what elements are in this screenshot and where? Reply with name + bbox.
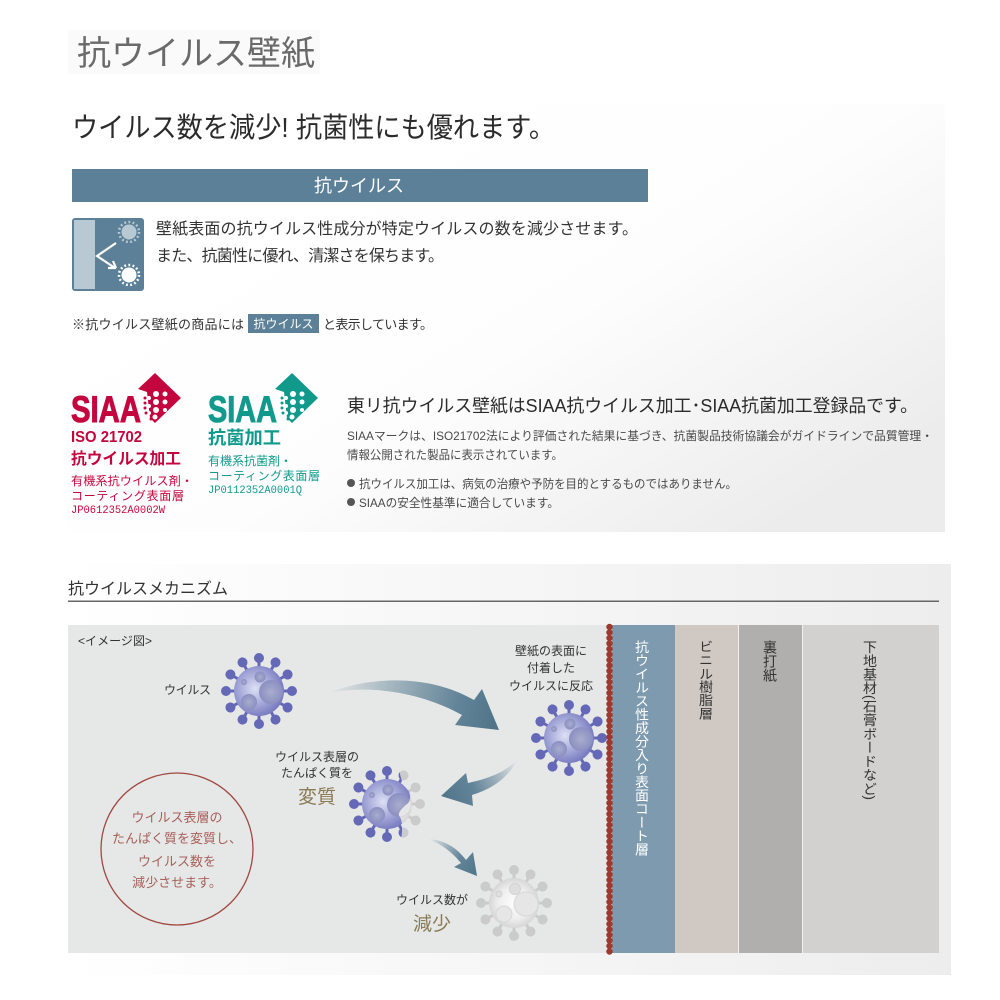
SIAA description xyxy=(347,428,933,462)
denature label: 変質 xyxy=(298,786,336,808)
callout circle: たんぱく質を変質し、 xyxy=(112,831,242,846)
logo: SIAA antibacterial: 抗菌加工 xyxy=(208,428,281,448)
denature label xyxy=(275,750,359,808)
logo: SIAA anti-virus xyxy=(71,373,193,517)
description text xyxy=(156,220,638,265)
panel: mechanism xyxy=(68,564,951,975)
note with tag: 抗ウイルス xyxy=(253,317,314,331)
layer: vinyl resin: ビニル樹脂層 xyxy=(698,640,714,721)
reaction label xyxy=(509,644,593,693)
virus 4: faded xyxy=(476,865,552,941)
callout circle xyxy=(101,773,253,925)
virus 3: half denatured xyxy=(349,766,425,842)
page title: 抗ウイルス壁紙 xyxy=(77,35,315,73)
callout circle: ウイルス表層の xyxy=(131,810,223,825)
logo: SIAA anti-virus: コーティング表面層 xyxy=(71,489,184,503)
reduced label: 減少 xyxy=(413,913,451,935)
reaction label: ウイルスに反応 xyxy=(509,679,593,693)
arrow: to surface xyxy=(328,680,499,730)
logo: SIAA antibacterial xyxy=(208,373,320,497)
callout circle: ウイルス数を xyxy=(138,854,216,869)
reduced label: ウイルス数が xyxy=(396,892,468,907)
section bar: anti-virus xyxy=(72,169,648,202)
layer: anti-virus coat xyxy=(612,625,675,953)
SIAA description: SIAAマークは、ISO21702法により評価された結果に基づき、抗菌製品技術協議会がガイドラインで品質管理・ xyxy=(347,428,933,443)
layer: backing paper: 裏打紙 xyxy=(762,640,778,683)
icon: wallpaper and viruses xyxy=(72,218,144,291)
logo: SIAA antibacterial: JP0112352A0001Q xyxy=(208,485,302,497)
image note: <イメージ図> xyxy=(78,634,152,648)
layer: vinyl resin xyxy=(675,625,738,953)
arrow: to denature xyxy=(441,760,517,806)
reaction label: 壁紙の表面に xyxy=(515,644,587,658)
logo: SIAA anti-virus: JP0612352A0002W xyxy=(71,505,165,517)
logo: SIAA antibacterial: 有機系抗菌剤・ xyxy=(208,454,292,468)
layer: backing paper xyxy=(739,625,802,953)
logo: SIAA anti-virus: SIAA xyxy=(71,389,141,430)
SIAA bullet notes: 抗ウイルス加工は、病気の治療や予防を目的とするものではありません。 xyxy=(359,476,737,491)
virus 2 xyxy=(531,700,607,776)
logo: SIAA anti-virus: 有機系抗ウイルス剤・ xyxy=(71,474,193,488)
logo: SIAA anti-virus: ISO 21702 xyxy=(71,429,142,446)
mechanism heading: 抗ウイルスメカニズム xyxy=(68,580,228,598)
SIAA heading: 東リ抗ウイルス壁紙はSIAA抗ウイルス加工･SIAA抗菌加工登録品です。 xyxy=(347,396,918,416)
red bead surface coating xyxy=(606,627,613,952)
layer: base material: 下地基材(石膏ボードなど) xyxy=(862,640,878,800)
note with tag xyxy=(72,314,433,333)
panel: anti-virus overview xyxy=(68,104,945,532)
virus 1 xyxy=(221,653,297,729)
section bar: anti-virus: 抗ウイルス xyxy=(314,176,404,196)
SIAA bullet notes: SIAAの安全性基準に適合しています。 xyxy=(359,495,559,510)
description text: また、抗菌性に優れ、清潔さを保ちます。 xyxy=(156,247,444,265)
denature label: ウイルス表層の xyxy=(275,750,359,764)
callout circle: 減少させます。 xyxy=(132,875,222,890)
layer: anti-virus coat: 抗ウイルス性成分入り表面コート層 xyxy=(634,640,650,857)
note with tag: と表示しています。 xyxy=(323,317,433,332)
denature label: たんぱく質を xyxy=(281,765,353,780)
layer: base material xyxy=(803,625,939,953)
logo: SIAA antibacterial: SIAA xyxy=(208,389,277,430)
headline: ウイルス数を減少! 抗菌性にも優れます。 xyxy=(72,112,555,143)
reaction label: 付着した xyxy=(527,660,575,675)
note with tag: ※抗ウイルス壁紙の商品には xyxy=(72,317,244,332)
arrow: to reduced xyxy=(428,839,477,876)
logo: SIAA antibacterial: コーティング表面層 xyxy=(208,469,320,483)
reduced label xyxy=(396,892,468,935)
description text: 壁紙表面の抗ウイルス性成分が特定ウイルスの数を減少させます。 xyxy=(156,220,638,238)
diagram background xyxy=(68,625,612,953)
SIAA description: 情報公開された製品に表示されています。 xyxy=(347,448,563,462)
SIAA bullet notes xyxy=(347,476,737,510)
logo: SIAA anti-virus: 抗ウイルス加工 xyxy=(71,449,181,468)
virus label: ウイルス xyxy=(164,683,211,697)
